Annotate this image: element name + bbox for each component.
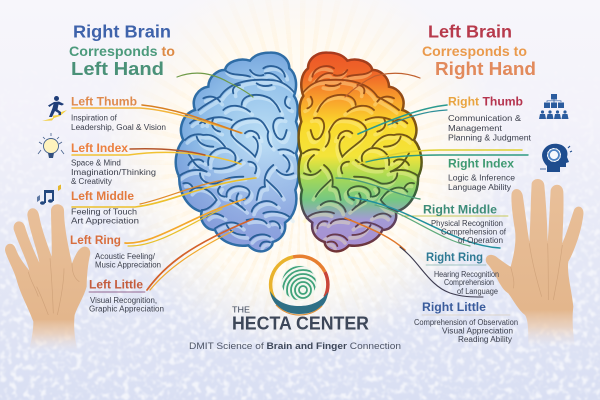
- label: left thumb: Leadership, Goal & Vision: [71, 123, 166, 132]
- label: right thumb: Communication &: [448, 114, 522, 123]
- label: left middle: [71, 191, 139, 226]
- logo wordmark: [232, 304, 369, 334]
- label: left middle: Art Appreciation: [71, 216, 139, 226]
- label: left thumb: Left Thumb: [71, 96, 137, 108]
- label: left index: Left Index: [71, 143, 129, 155]
- label: right ring: Hearing Recognition: [434, 270, 499, 279]
- label: right ring: Right Ring: [426, 252, 483, 264]
- label: left index: & Creativity: [71, 177, 112, 186]
- icon: music notes: [37, 184, 61, 205]
- connector lines: right hand fingers to left brain: [336, 73, 528, 315]
- label: right little: Right Little: [422, 302, 486, 314]
- label: right middle: Comprehension of: [441, 228, 507, 236]
- heading: right brain: Left Hand: [71, 59, 164, 79]
- right hemisphere in blues: [176, 53, 299, 251]
- speckled background texture: [0, 162, 600, 400]
- label: right thumb: Management: [448, 124, 503, 133]
- icon: light bulb: [38, 133, 64, 158]
- label: right middle: of Operation: [458, 236, 503, 245]
- logo wordmark: THE: [232, 304, 250, 314]
- label: right index: Logic & Inference: [448, 174, 516, 182]
- label: left middle: Feeling of Touch: [71, 208, 137, 216]
- label: left ring: Left Ring: [70, 235, 121, 247]
- heading: left brain: Right Hand: [435, 59, 536, 79]
- label: left index: Space & Mind: [71, 158, 121, 168]
- brain illustration: [176, 53, 422, 251]
- heading: left brain: Corresponds to: [422, 44, 527, 59]
- label: right little: [414, 302, 518, 344]
- label: right middle: Physical Recognition: [431, 219, 503, 228]
- connector lines: left hand fingers to right brain: [72, 73, 256, 292]
- label: right thumb: Right Thumb: [448, 96, 523, 108]
- label: right ring: Comprehension: [444, 278, 494, 287]
- fingerprint: [282, 266, 316, 300]
- label: right little: Comprehension of Observation: [414, 318, 518, 327]
- left hemisphere in rainbow colours: [299, 53, 422, 251]
- label: left little: Graphic Appreciation: [89, 304, 164, 314]
- label: left index: [71, 143, 156, 186]
- heading: right brain: Corresponds to: [69, 44, 175, 59]
- label: left thumb: [71, 96, 166, 132]
- heading: left brain: [422, 22, 536, 79]
- label: left index: Imagination/Thinking: [71, 168, 156, 177]
- label: left ring: Music Appreciation: [95, 260, 161, 270]
- label: left little: Visual Recognition,: [90, 296, 157, 305]
- label: right index: Right Index: [448, 158, 515, 170]
- tagline: DMIT Science of Brain and Finger Connection: [189, 341, 401, 352]
- label: right middle: Right Middle: [423, 204, 497, 216]
- heading: right brain: Right Brain: [73, 22, 171, 42]
- icon: climber on stairs: [42, 96, 67, 121]
- label: left little: Left Little: [89, 280, 143, 292]
- label: right ring: [426, 252, 499, 296]
- label: right little: Visual Appreciation: [442, 326, 513, 336]
- label: right ring: of Language: [457, 287, 498, 296]
- label: right thumb: Planning & Judgment: [448, 134, 532, 142]
- icon: organisation chart: [539, 94, 568, 119]
- label: right index: [448, 158, 516, 192]
- heading: right brain: [69, 22, 175, 79]
- logo wordmark: HECTA CENTER: [232, 314, 369, 334]
- label: right index: Language Ability: [448, 183, 511, 192]
- label: left little: [89, 280, 164, 314]
- logo: fingerprint ring: [270, 256, 328, 315]
- right hand: [486, 179, 583, 347]
- label: left ring: Acoustic Feeling/: [95, 252, 156, 261]
- icon: head with gear: [540, 144, 572, 172]
- label: right thumb: [448, 96, 532, 142]
- left hand: [5, 204, 90, 352]
- label: right middle: [423, 204, 507, 245]
- heading: left brain: Left Brain: [428, 22, 512, 42]
- label: left ring: [70, 235, 161, 270]
- label: left thumb: Inspiration of: [71, 114, 118, 122]
- label: right little: Reading Ability: [458, 335, 512, 344]
- label: left middle: Left Middle: [71, 191, 134, 203]
